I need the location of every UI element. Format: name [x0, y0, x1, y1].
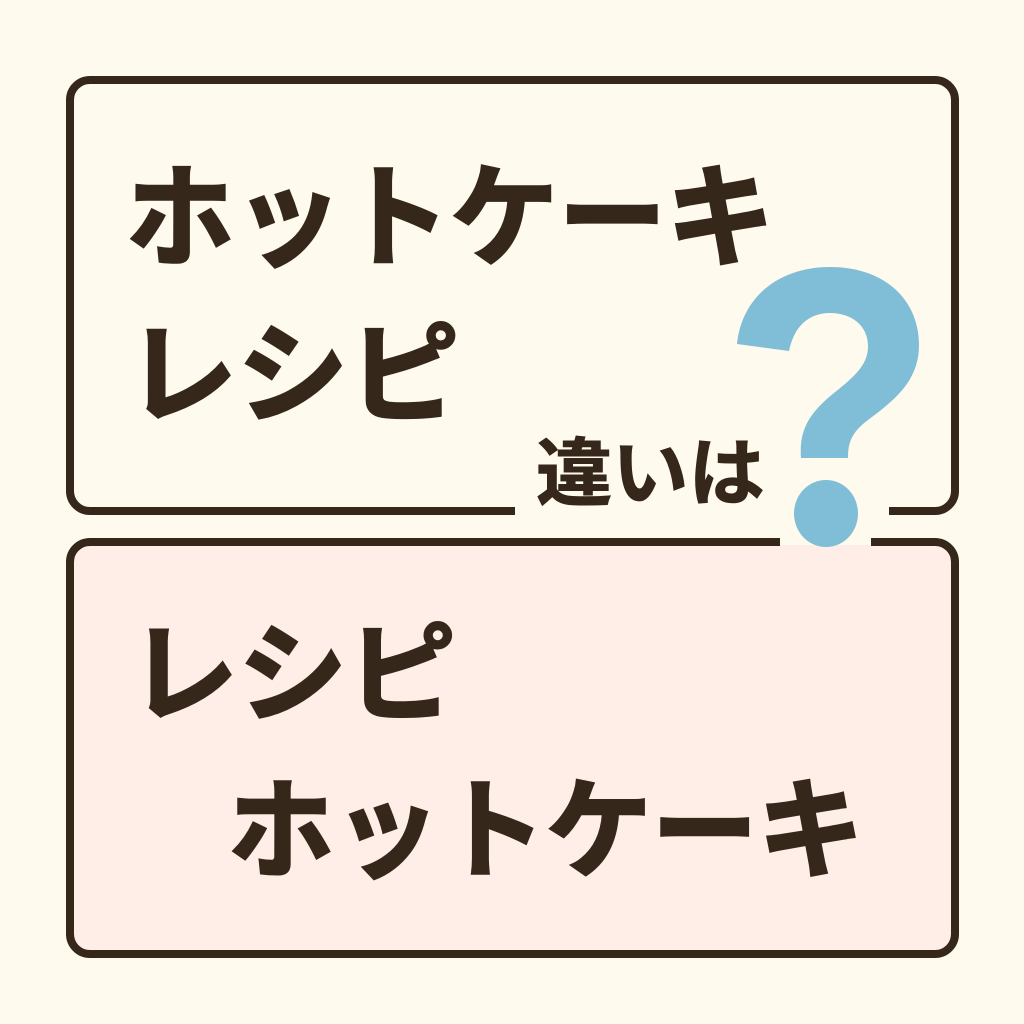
gap in bottom box border	[780, 536, 871, 547]
panel: top recipe box	[66, 76, 959, 515]
question text: 違いは	[536, 432, 765, 515]
gap in top box border	[515, 500, 889, 520]
top heading line 1: ホットケーキ	[126, 156, 774, 281]
icon: question mark	[737, 267, 919, 547]
panel: bottom recipe box	[66, 538, 959, 958]
top heading line 2: レシピ	[126, 315, 460, 437]
bottom heading line 2: ホットケーキ	[228, 771, 863, 893]
bottom heading line 1: レシピ	[129, 614, 456, 735]
